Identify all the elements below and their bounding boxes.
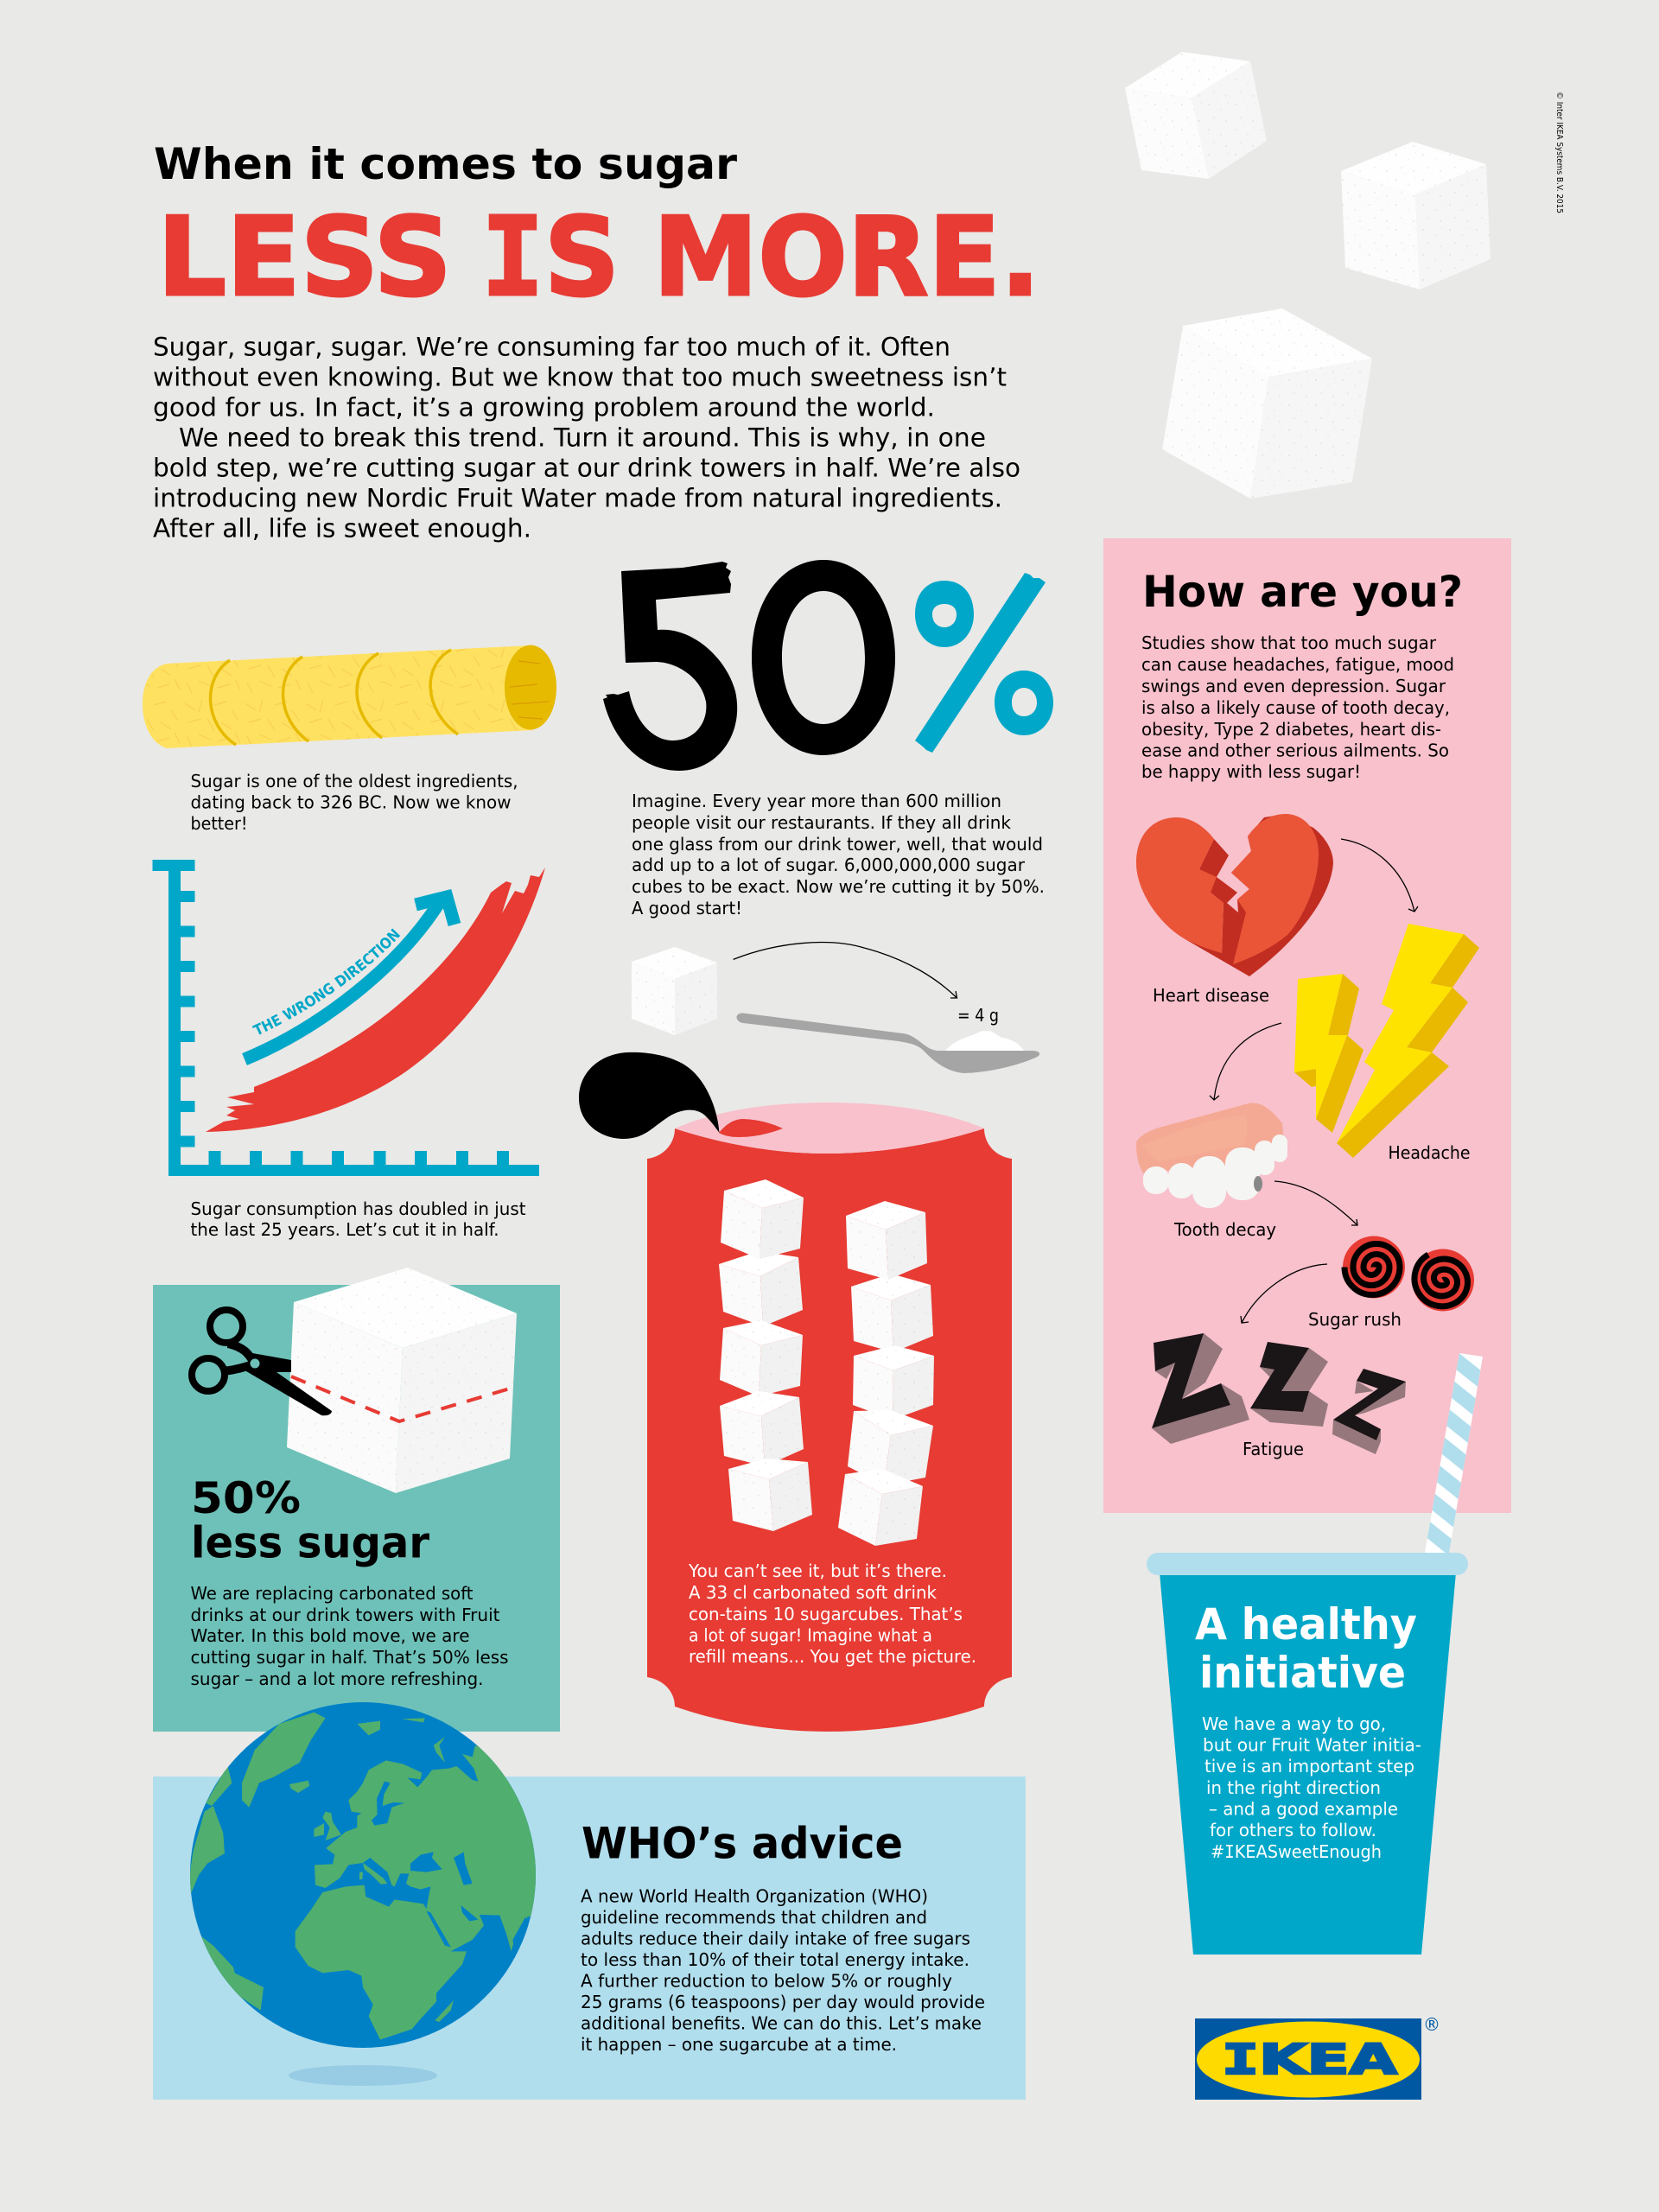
arrow: cube to spoon — [734, 943, 957, 998]
intro text: without even knowing. But we know that too much sweetness isn’t — [153, 363, 1007, 392]
icon: teeth — [1136, 1103, 1287, 1208]
body text: We are replacing carbonated soft — [190, 1583, 474, 1604]
panel: WHO advice — [153, 1702, 1026, 2100]
paragraph: imagine: one glass from our drink tower, well, that would — [632, 834, 1043, 855]
copyright note: © Inter IKEA Systems B.V. 2015 — [1554, 92, 1564, 213]
body text — [190, 1583, 508, 1689]
icon: sugar cane roll — [143, 645, 556, 748]
body text: 25 grams (6 teaspoons) per day would provide — [581, 1992, 985, 2012]
sugar cube large — [1162, 308, 1372, 499]
caption: oldest ingredient: Sugar is one of the oldest ingredients, — [190, 771, 518, 791]
paragraph: imagine: add up to a lot of sugar. 6,000,000,000 sugar — [632, 855, 1026, 875]
intro text: bold step, we’re cutting sugar at our drink towers in half. We’re also — [153, 454, 1020, 483]
body text: it happen – one sugarcube at a time. — [581, 2034, 897, 2055]
label: headache: Headache — [1388, 1142, 1471, 1163]
chart: sugar consumption growth — [152, 860, 545, 1176]
icon: globe — [188, 1702, 547, 2048]
body text: guideline recommends that children and — [581, 1907, 927, 1928]
can text: A 33 cl carbonated soft drink — [689, 1582, 937, 1603]
big sugar cube — [287, 1268, 517, 1493]
title: IS — [481, 194, 620, 321]
can text: refill means... You get the picture. — [689, 1646, 976, 1667]
body text: in the right direction — [1206, 1777, 1381, 1798]
heading: 50% — [191, 1473, 301, 1523]
intro text: good for us. In fact, it’s a growing problem around the world. — [153, 393, 935, 423]
arrow: heart to headache — [1341, 839, 1418, 912]
can text: You can’t see it, but it’s there. — [688, 1560, 947, 1581]
icon: lightning bolts — [1294, 924, 1479, 1158]
body text: is also a likely cause of tooth decay, — [1141, 697, 1450, 718]
heading: less sugar — [191, 1517, 429, 1567]
body text: A further reduction to below 5% or roughly — [581, 1970, 952, 1991]
body text — [581, 1885, 985, 2055]
label: tooth decay: Tooth decay — [1173, 1219, 1276, 1240]
caption: consumption doubled — [190, 1198, 525, 1240]
panel: how are you — [1103, 538, 1511, 1513]
logo: IKEA: I KEA — [1222, 2036, 1397, 2084]
paragraph: imagine — [632, 791, 1045, 918]
body text: We have a way to go, — [1202, 1713, 1386, 1734]
logo: IKEA: ® — [1423, 2014, 1440, 2035]
body text: additional benefits. We can do this. Let’s make — [581, 2013, 982, 2034]
blue direction arrow — [245, 897, 454, 1059]
body text: cutting sugar in half. That’s 50% less — [190, 1647, 508, 1668]
body text: – and a good example — [1209, 1799, 1398, 1820]
label: sugar rush: Sugar rush — [1308, 1309, 1402, 1330]
caption: consumption doubled: Sugar consumption has doubled in just — [190, 1198, 525, 1219]
body text: drinks at our drink towers with Fruit — [190, 1605, 499, 1625]
paragraph: imagine: A good start! — [632, 898, 742, 918]
intro text: We need to break this trend. Turn it around. This is why, in one — [179, 423, 986, 453]
sugar cube stack left — [719, 1179, 812, 1531]
heading: How are you? — [1142, 567, 1463, 617]
title: MORE. — [653, 194, 1040, 321]
body text: adults reduce their daily intake of free sugars — [581, 1929, 970, 1949]
paragraph: imagine: cubes to be exact. Now we’re cutting it by 50%. — [632, 876, 1045, 897]
body text: can cause headaches, fatigue, mood — [1141, 654, 1454, 675]
curved label: THE WRONG DIRECTION — [252, 928, 401, 1035]
body text: swings and even depression. Sugar — [1141, 676, 1446, 696]
body text: #IKEASweetEnough — [1211, 1841, 1382, 1862]
label: 4 g: = 4 g — [957, 1005, 999, 1026]
can text: a lot of sugar! Imagine what a — [689, 1624, 932, 1645]
intro text: After all, life is sweet enough. — [153, 514, 531, 543]
paragraph: imagine: people visit our restaurants. If they all drink — [632, 812, 1011, 833]
body text: sugar – and a lot more refreshing. — [190, 1669, 484, 1689]
body text: be happy with less sugar! — [1141, 761, 1361, 782]
sugar cube top left — [1125, 52, 1267, 179]
globe shadow — [289, 2065, 437, 2086]
icon: Z letters — [1152, 1333, 1406, 1454]
icon: broken heart — [1136, 814, 1333, 976]
cup — [1147, 1553, 1468, 1955]
title: When it comes to sugar — [154, 139, 737, 189]
icon: candy spirals — [1343, 1236, 1476, 1316]
intro text: Sugar, sugar, sugar. We’re consuming far too much of it. Often — [153, 333, 950, 362]
intro text — [153, 333, 1020, 543]
intro text: introducing new Nordic Fruit Water made from natural ingredients. — [153, 484, 1002, 513]
title — [154, 139, 1040, 321]
body text: for others to follow. — [1210, 1820, 1376, 1840]
body text: A new World Health Organization (WHO) — [581, 1885, 928, 1906]
heading: A healthy — [1195, 1599, 1417, 1649]
heading: WHO’s advice — [582, 1818, 903, 1868]
sugar cube stack right — [838, 1201, 934, 1546]
infographic canvas — [143, 52, 1563, 2100]
can opening — [719, 1119, 783, 1137]
arrow: teeth to candy — [1274, 1181, 1357, 1225]
soda can — [579, 1052, 1012, 1732]
caption: oldest ingredient — [190, 771, 518, 834]
caption: consumption doubled: the last 25 years. Let’s cut it in half. — [190, 1219, 499, 1240]
body text: Studies show that too much sugar — [1141, 632, 1437, 653]
sugar cube small — [632, 947, 717, 1035]
icon: drinking straw — [1425, 1353, 1483, 1553]
can text — [688, 1560, 976, 1667]
body text: Water. In this bold move, we are — [190, 1625, 470, 1646]
chart axes — [152, 860, 539, 1176]
body text: but our Fruit Water initia- — [1203, 1735, 1421, 1756]
paragraph: imagine: Imagine. Every year more than 600 million — [632, 791, 1001, 811]
arrow: headache to teeth — [1210, 1023, 1281, 1100]
logo: IKEA — [1195, 2014, 1440, 2100]
body text: ease and other serious ailments. So — [1141, 740, 1449, 760]
can text: con-tains 10 sugarcubes. That’s — [689, 1604, 963, 1624]
black drop — [579, 1052, 719, 1139]
caption: oldest ingredient: better! — [190, 813, 247, 834]
heading — [191, 1473, 429, 1567]
caption: oldest ingredient: dating back to 326 BC. Now we know — [190, 791, 512, 812]
big 50 percent — [603, 560, 1053, 771]
icon: scissors — [192, 1310, 332, 1415]
body text: tive is an important step — [1205, 1756, 1414, 1777]
heading: initiative — [1199, 1648, 1406, 1698]
body text: obesity, Type 2 diabetes, heart dis- — [1141, 719, 1441, 740]
dashed cut line — [291, 1376, 510, 1421]
label: heart disease: Heart disease — [1153, 985, 1269, 1006]
body text — [1202, 1713, 1421, 1862]
sugar cube top right — [1341, 142, 1491, 289]
icon: spoon with sugar — [736, 1013, 1039, 1073]
red brush curve — [206, 868, 545, 1132]
arrow: candy to fatigue — [1241, 1264, 1327, 1323]
heading — [1195, 1599, 1417, 1698]
body text — [1141, 632, 1454, 782]
body text: to less than 10% of their total energy intake. — [581, 1949, 969, 1970]
title: LESS — [157, 194, 452, 321]
label: fatigue: Fatigue — [1243, 1439, 1304, 1459]
panel: 50% less sugar — [153, 1268, 560, 1732]
